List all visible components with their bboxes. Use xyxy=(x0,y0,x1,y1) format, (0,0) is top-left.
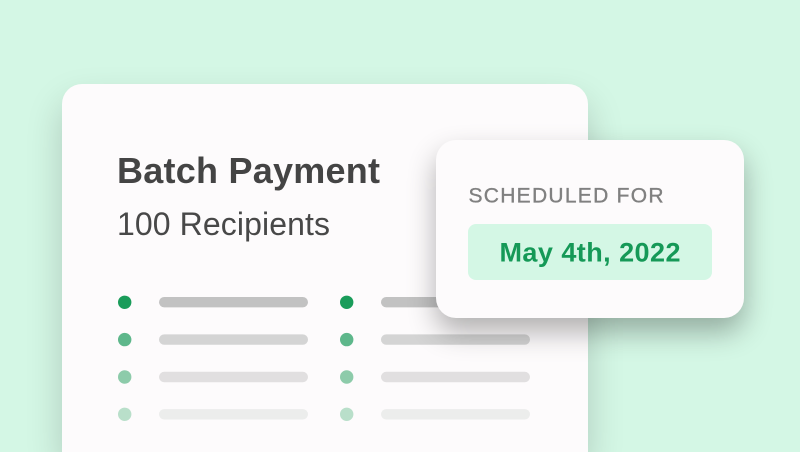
card text and recipient list xyxy=(117,150,530,421)
date: May 4th, 2022: May 4th, 2022 xyxy=(500,238,680,268)
label: scheduled for: SCHEDULED FOR xyxy=(468,184,664,207)
row 3 right xyxy=(340,370,530,384)
row 4 left xyxy=(118,408,308,421)
recipient list xyxy=(118,296,530,421)
row 1 right xyxy=(340,296,530,309)
heading: Batch Payment: Batch Payment xyxy=(117,150,380,191)
row 1 left xyxy=(118,296,308,309)
panel: scheduled for card xyxy=(436,140,744,318)
row 2 left xyxy=(118,333,308,346)
date pill background xyxy=(468,224,712,280)
row 4 right xyxy=(340,408,530,421)
row 3 left xyxy=(118,370,308,384)
scheduled card text xyxy=(468,184,680,268)
row 2 right xyxy=(340,333,530,346)
panel: batch payment card xyxy=(62,84,588,452)
text: 100 Recipients: 100 Recipients xyxy=(117,206,330,242)
